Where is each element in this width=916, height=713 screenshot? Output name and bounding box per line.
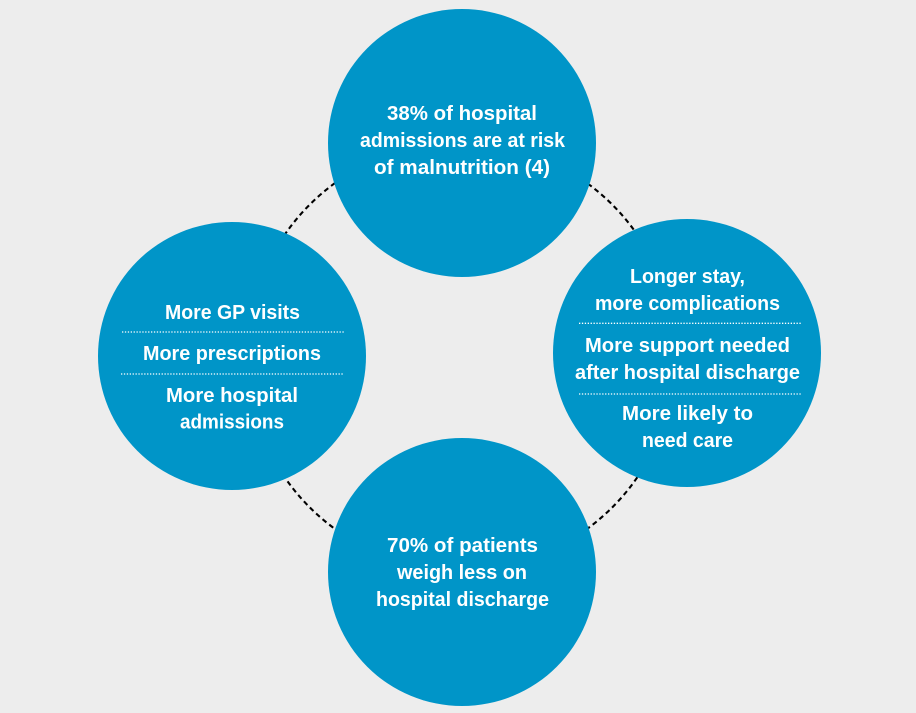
text: patients weigh less: 70% of patients	[387, 535, 538, 557]
text: longer stay: more complications	[595, 293, 780, 315]
text: more prescriptions: More prescriptions	[143, 343, 321, 365]
text: patients weigh less	[376, 535, 549, 611]
text: longer stay	[595, 266, 780, 315]
text: admissions at risk: 38% of hospital	[387, 103, 537, 125]
text: more support needed: after hospital discharge	[575, 362, 800, 384]
panel: bottom circle, patient weight	[328, 438, 596, 706]
text: longer stay: Longer stay,	[630, 266, 745, 288]
text: more hospital admissions: admissions	[180, 412, 284, 434]
text: more hospital admissions	[166, 385, 298, 434]
text: more support needed	[575, 335, 800, 384]
text: admissions at risk: of malnutrition (4)	[374, 157, 550, 179]
panel: top circle, hospital admissions	[328, 9, 596, 277]
text: more likely to need care: need care	[642, 430, 733, 452]
text: admissions at risk: admissions are at risk	[360, 130, 566, 152]
text: more GP visits: More GP visits	[165, 302, 300, 324]
panel: right circle, hospital outcomes	[553, 219, 821, 487]
text: more support needed: More support needed	[585, 335, 790, 357]
text: more hospital admissions: More hospital	[166, 385, 298, 407]
text: more likely to need care	[622, 403, 753, 452]
dashed ring connecting circles	[247, 142, 675, 570]
text: more likely to need care: More likely to	[622, 403, 753, 425]
panel: left circle, healthcare use	[98, 222, 366, 490]
text: patients weigh less: hospital discharge	[376, 589, 549, 611]
text: admissions at risk	[360, 103, 566, 179]
text: patients weigh less: weigh less on	[396, 562, 527, 584]
